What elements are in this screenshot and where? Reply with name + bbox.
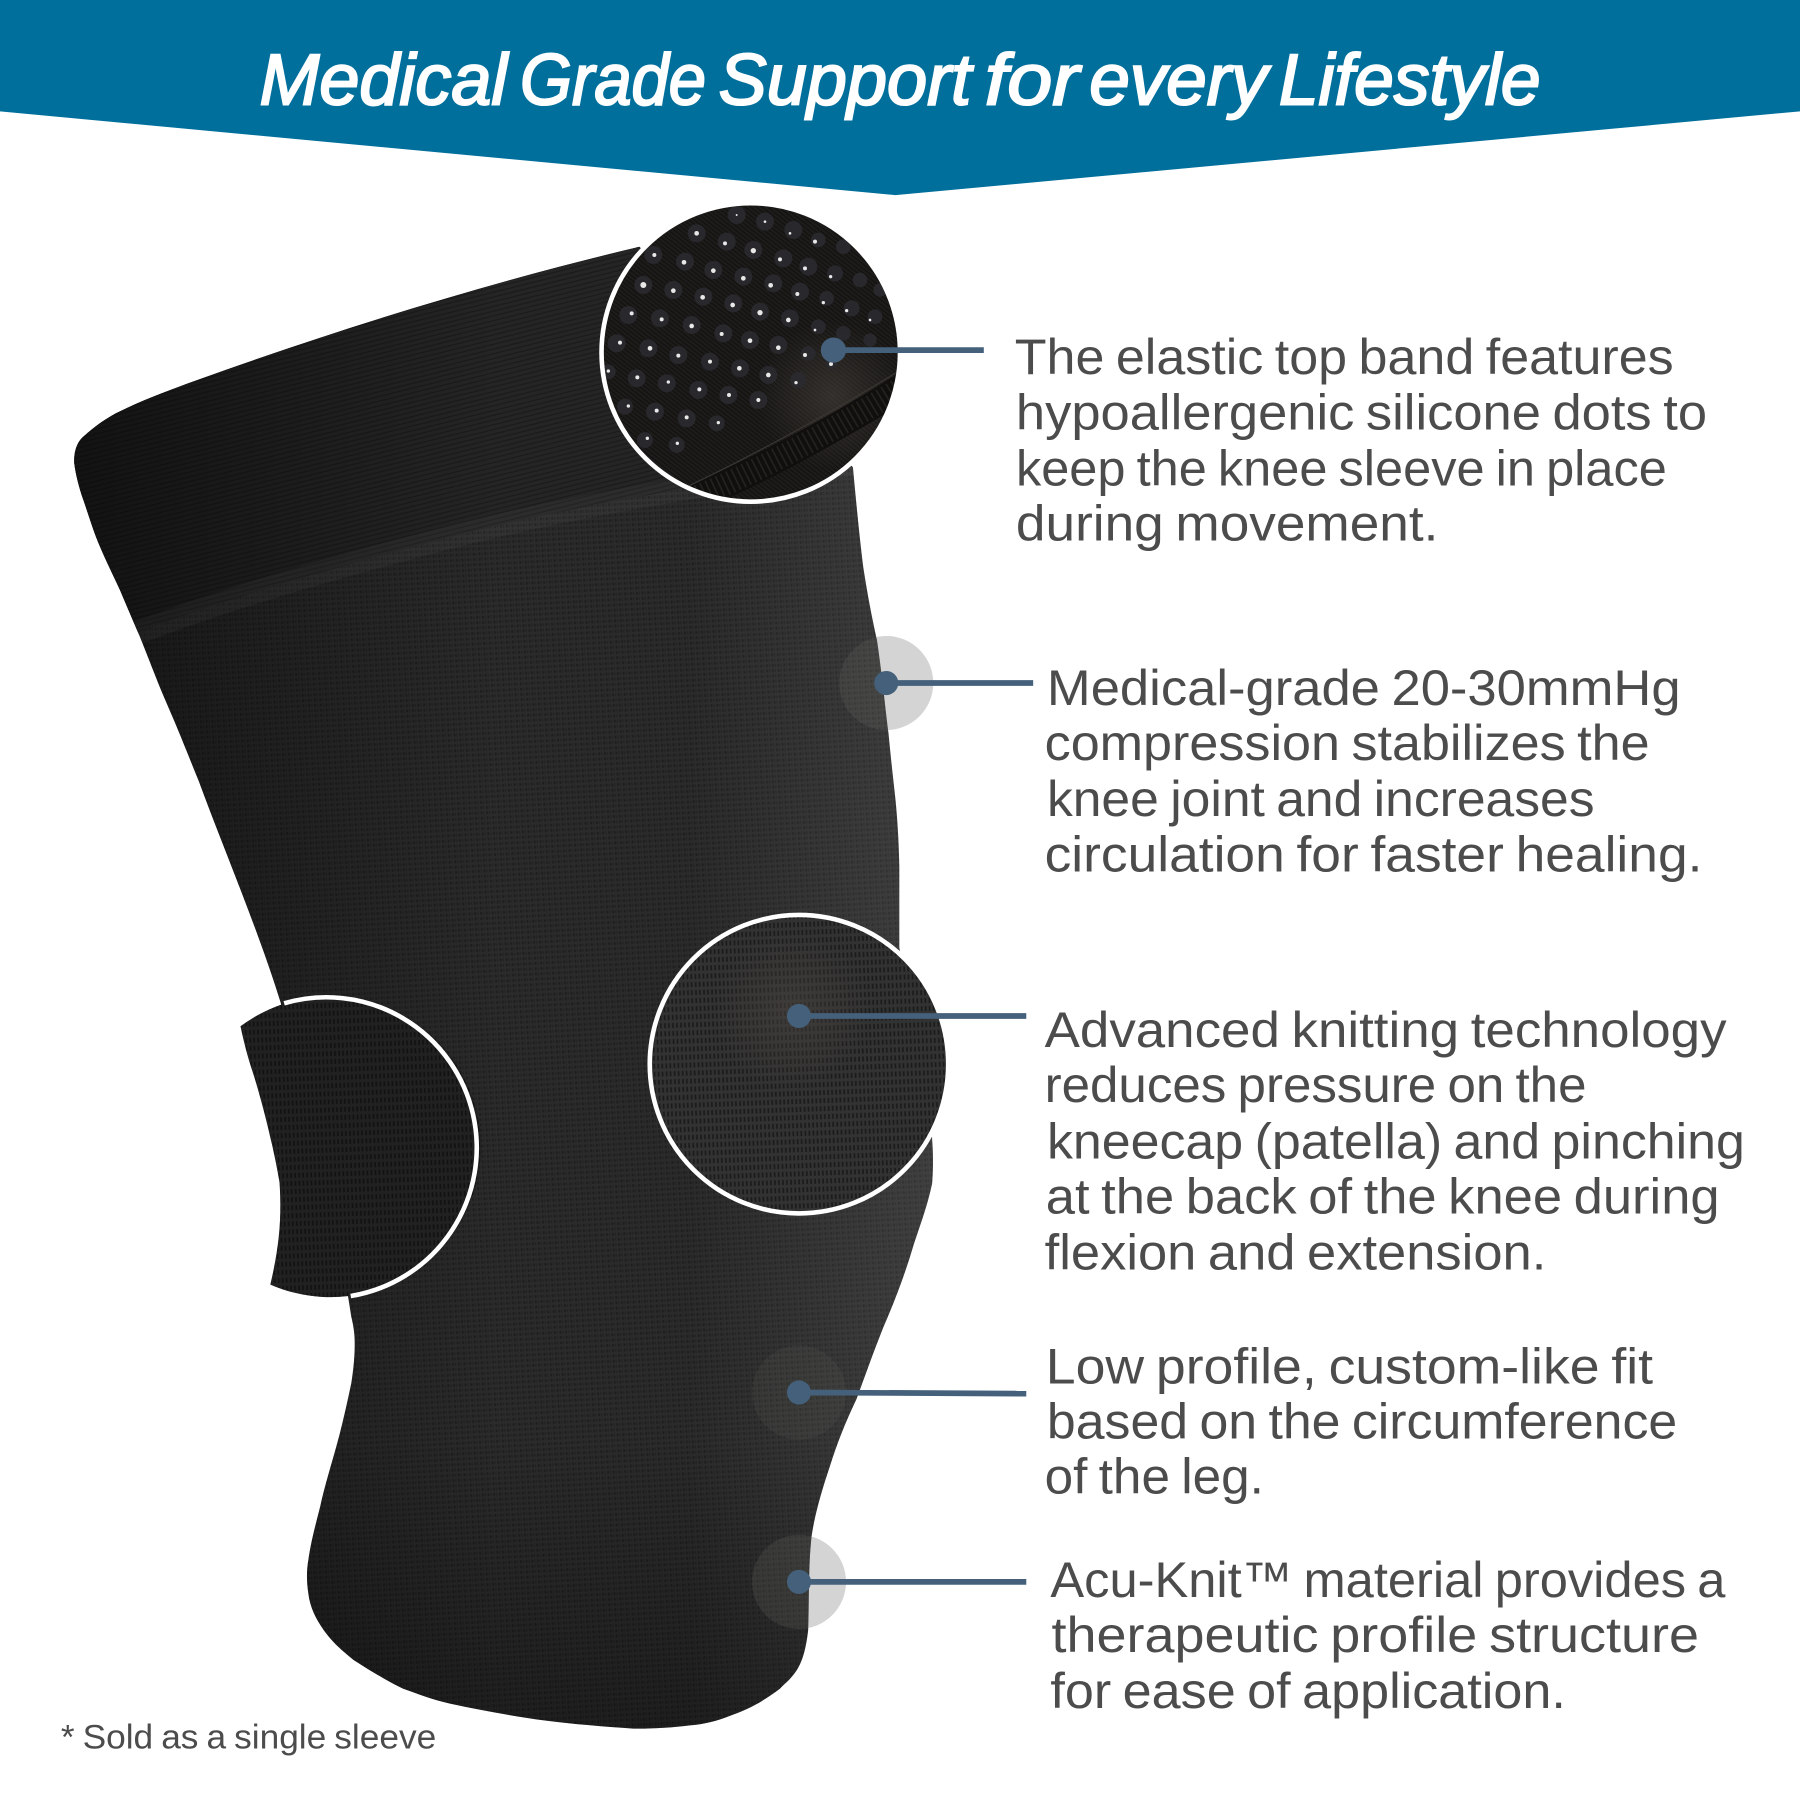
banner [0, 0, 1800, 195]
text block: knitting technology: kneecap (patella) and pinching [1047, 1113, 1745, 1169]
footnote: * Sold as a single sleeve [61, 1718, 436, 1756]
knee sleeve [46, 230, 964, 1745]
highlight on sleeve: low profile [752, 1345, 846, 1440]
title: Medical [259, 40, 509, 120]
text block: low profile: based on the circumference [1047, 1393, 1677, 1449]
text block: knitting technology: Advanced knitting technology [1045, 1002, 1727, 1058]
inset: side knit detail [240, 996, 481, 1297]
callout pointer: compression [874, 671, 1033, 695]
title: Grade [520, 40, 706, 120]
text block: acu-knit: for ease of application. [1050, 1663, 1566, 1719]
highlight on sleeve: compression [840, 638, 888, 730]
text block: top band: hypoallergenic silicone dots to [1016, 384, 1707, 440]
title: Support [719, 40, 974, 120]
top band of sleeve [74, 246, 682, 632]
text block: knitting technology: flexion and extension. [1045, 1225, 1546, 1281]
title [259, 40, 1541, 120]
callout highlight: compression (behind sleeve) [839, 636, 933, 730]
text block: compression [1045, 660, 1702, 882]
title: every [1089, 40, 1271, 120]
callout highlight: acu-knit (behind sleeve) [752, 1535, 846, 1629]
text block: low profile [1045, 1338, 1677, 1504]
inset: front knit detail [650, 915, 948, 1213]
callout pointer: knitting [787, 1004, 1026, 1028]
text block: low profile: of the leg. [1045, 1448, 1264, 1504]
text block: top band: keep the knee sleeve in place [1016, 441, 1667, 497]
text block: top band: The elastic top band features [1015, 329, 1674, 385]
text block: acu-knit: Acu-Knit™ material provides a [1050, 1552, 1726, 1608]
title: for [985, 40, 1082, 120]
silicone dots [601, 206, 887, 453]
callout pointer: acu-knit [787, 1570, 1026, 1594]
text block: low profile: Low profile, custom-like fit [1046, 1338, 1653, 1394]
text block: knitting technology: reduces pressure on the [1045, 1057, 1586, 1113]
text block: top band: during movement. [1016, 496, 1438, 552]
text block: compression: knee joint and increases [1047, 771, 1595, 827]
inset: silicone dots detail [601, 203, 907, 505]
text block: acu-knit [1050, 1552, 1726, 1719]
text block: compression: compression stabilizes the [1045, 715, 1650, 771]
text block: compression: circulation for faster healing. [1045, 826, 1702, 882]
text block: top band [1015, 329, 1707, 552]
title: Lifestyle [1279, 40, 1541, 120]
text block: knitting technology [1045, 1002, 1745, 1281]
text block: acu-knit: therapeutic profile structure [1052, 1607, 1699, 1663]
callout pointer: low profile [787, 1380, 1026, 1405]
callout pointer: top band [821, 338, 984, 363]
highlight on sleeve: acu-knit [752, 1535, 812, 1629]
text block: knitting technology: at the back of the knee during [1046, 1168, 1720, 1224]
text block: compression: Medical-grade 20-30mmHg [1047, 660, 1681, 716]
